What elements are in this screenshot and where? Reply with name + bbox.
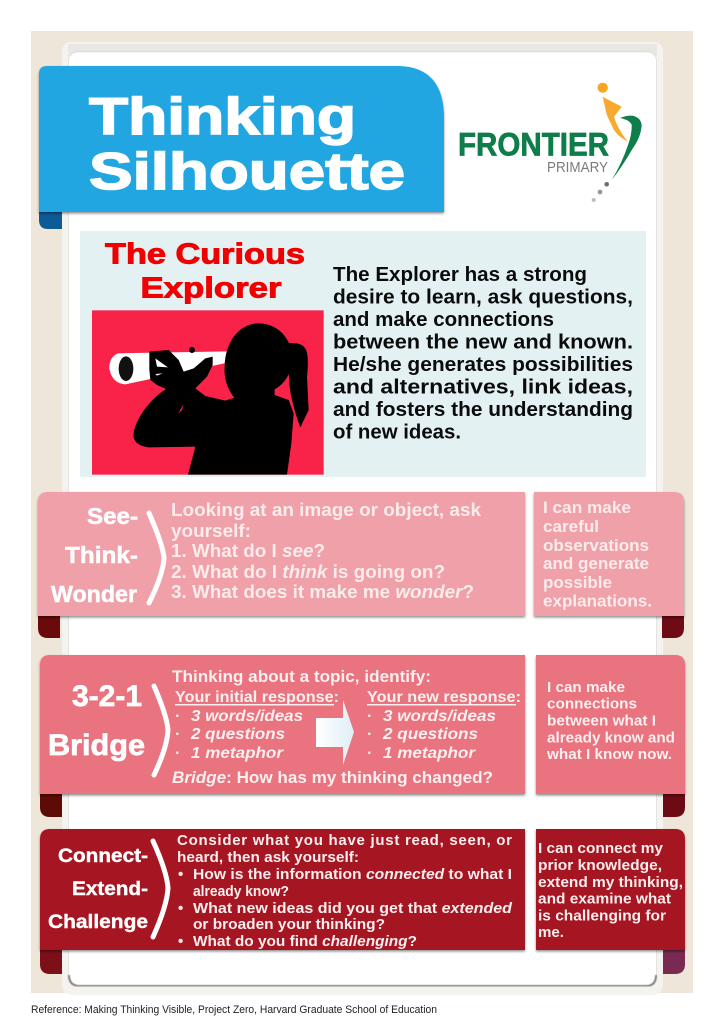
explorer description: and fosters the understanding <box>333 399 633 421</box>
column: initial response: 1 metaphor <box>191 745 284 762</box>
chevron <box>153 841 168 937</box>
routine name <box>48 680 145 762</box>
prompts: heard, then ask yourself: <box>177 849 359 866</box>
chevron <box>154 686 168 775</box>
routine name: Bridge <box>48 729 145 762</box>
explorer description: between the new and known. <box>333 332 633 354</box>
column: initial response: · <box>175 708 180 725</box>
panel: 3-2-1 Bridge <box>40 655 685 817</box>
explorer description: desire to learn, ask questions, <box>333 286 633 308</box>
title text <box>89 88 405 201</box>
outcome statement: and generate <box>543 555 649 573</box>
column: new response: · <box>367 708 372 725</box>
prompts: 3. What does it make me wonder? <box>171 582 474 602</box>
panel: the curious explorer <box>80 231 646 477</box>
column: new response: 1 metaphor <box>383 745 476 762</box>
routine name <box>48 845 148 933</box>
column: initial response: · <box>175 726 180 743</box>
outcome statement: what I know now. <box>546 746 672 763</box>
outcome statement: between what I <box>547 712 656 730</box>
explorer description: and make connections <box>333 309 554 331</box>
prompts: 2. What do I think is going on? <box>171 562 445 582</box>
panel: Connect-Extend-Challenge <box>40 829 685 974</box>
column: new response: Your new response: <box>367 689 521 706</box>
routine name: 3-2-1 <box>72 680 142 713</box>
outcome statement: possible <box>543 574 612 592</box>
explorer description: and alternatives, link ideas, <box>333 376 633 398</box>
prompts: yourself: <box>171 521 251 541</box>
chevron <box>149 513 164 603</box>
logo: Frontier Primary: PRIMARY <box>547 159 608 176</box>
outcome statement: extend my thinking, <box>538 874 683 891</box>
routine name: Wonder <box>51 581 137 607</box>
prompts: or broaden your thinking? <box>193 916 385 933</box>
outcome statement: I can connect my <box>538 840 664 857</box>
column: initial response: · <box>175 745 180 762</box>
outcome statement: explanations. <box>543 592 652 610</box>
icon: silhouette with telescope <box>92 310 324 475</box>
prompts: What new ideas did you get that extended <box>193 900 513 917</box>
explorer description: The Explorer has a strong <box>333 264 587 286</box>
outcome statement <box>543 499 652 610</box>
column: new response <box>367 689 521 762</box>
column: initial response: 3 words/ideas <box>191 708 303 725</box>
outcome statement: and examine what <box>538 890 671 908</box>
explorer description <box>333 264 633 444</box>
logo: Frontier Primary <box>458 83 642 202</box>
outcome statement: is challenging for <box>538 908 666 924</box>
column: new response: 2 questions <box>382 726 478 743</box>
heading: The Curious Explorer <box>105 238 305 304</box>
outcome statement <box>538 840 683 941</box>
column: initial response: 2 questions <box>190 726 285 743</box>
outcome statement: connections <box>547 696 637 712</box>
outcome statement: prior knowledge, <box>538 857 662 874</box>
panel: See-Think-Wonder <box>38 492 684 638</box>
explorer description: He/she generates possibilities <box>333 354 633 376</box>
routine name: Think- <box>65 542 138 568</box>
outcome statement: I can make <box>547 679 625 696</box>
prompts: What do you find challenging? <box>193 933 417 950</box>
title banner <box>39 66 444 229</box>
prompts <box>171 500 482 602</box>
column: new response: 3 words/ideas <box>383 708 496 725</box>
prompts: 1. What do I see? <box>171 541 325 561</box>
column: initial response: Your initial response: <box>175 689 339 706</box>
prompts <box>177 832 513 950</box>
arrow <box>316 700 354 765</box>
column: new response: · <box>367 745 372 762</box>
routine name <box>51 503 138 607</box>
prompts: • <box>178 866 183 883</box>
explorer description: of new ideas. <box>333 422 461 444</box>
routine name: Connect- <box>58 845 148 867</box>
prompts: Consider what you have just read, seen, or <box>177 832 512 849</box>
heading: The Curious Explorer: The Curious <box>105 238 305 270</box>
title text: Silhouette <box>89 143 405 201</box>
prompts <box>172 667 493 787</box>
outcome statement: careful <box>543 518 599 536</box>
outcome statement: observations <box>543 537 649 555</box>
column: initial response <box>175 689 339 762</box>
prompts: already know? <box>193 883 289 900</box>
heading: The Curious Explorer: Explorer <box>140 272 282 304</box>
logo: Frontier Primary: FRONTIER <box>458 126 609 162</box>
prompts: How is the information connected to what I <box>193 866 512 883</box>
prompts: Thinking about a topic, identify: <box>172 667 431 686</box>
routine name: Extend- <box>72 878 148 900</box>
prompts: Bridge: How has my thinking changed? <box>172 768 493 787</box>
title text: Thinking <box>89 88 356 146</box>
outcome statement <box>546 679 675 763</box>
outcome statement: I can make <box>543 499 631 517</box>
routine name: See- <box>87 503 138 529</box>
prompts: • <box>178 900 183 917</box>
prompts: • <box>178 933 183 950</box>
outcome statement: already know and <box>547 730 675 746</box>
outcome statement: me. <box>538 924 564 941</box>
prompts: Looking at an image or object, ask <box>171 500 482 520</box>
column: new response: · <box>367 726 372 743</box>
routine name: Challenge <box>48 911 148 933</box>
footer reference: Reference: Making Thinking Visible, Project Zero, Harvard Graduate School of Education <box>31 1004 437 1016</box>
